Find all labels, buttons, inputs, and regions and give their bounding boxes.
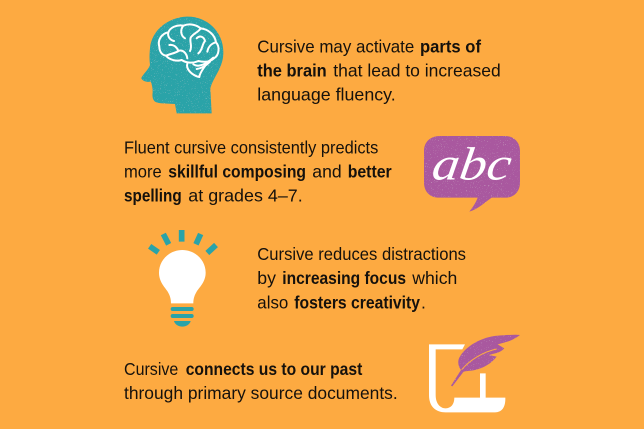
text block: focus	[257, 244, 466, 312]
icon: head with brain	[141, 17, 223, 113]
text block: past: through primary source documents.	[124, 383, 398, 403]
text block: composing: at grades 4–7.	[188, 186, 303, 206]
text block: composing: Fluent cursive consistently predicts	[124, 137, 379, 157]
text block: past	[124, 359, 398, 403]
text block: brain: language fluency.	[257, 84, 396, 104]
text block: focus: increasing focus	[282, 268, 406, 288]
text block: composing: spelling	[124, 186, 182, 206]
text block: brain: that lead to increased	[333, 60, 501, 80]
text block: composing: and	[312, 161, 342, 181]
text block: past: Cursive	[124, 359, 178, 379]
text block: composing: better	[348, 161, 392, 181]
text block: focus: fosters creativity	[294, 292, 420, 312]
icon: quill and scroll	[429, 335, 520, 412]
text block: composing	[124, 137, 392, 206]
text block: brain: Cursive may activate	[257, 36, 414, 56]
text block: brain: the brain	[257, 60, 327, 80]
text block: focus: .	[421, 292, 426, 312]
text block: focus: by	[257, 268, 276, 288]
icon: speech bubble abc: abc	[429, 139, 515, 191]
text block: composing: skillful composing	[168, 161, 306, 181]
text block: brain	[257, 36, 501, 104]
icon: light bulb	[150, 230, 216, 327]
text block: focus: which	[411, 268, 457, 288]
text block: past: connects us to our past	[186, 359, 362, 379]
text block: focus: Cursive reduces distractions	[257, 244, 466, 264]
text block: focus: also	[257, 292, 288, 312]
icon: speech bubble abc	[424, 136, 520, 212]
text block: composing: more	[124, 161, 162, 181]
text block: brain: parts of	[420, 36, 481, 56]
